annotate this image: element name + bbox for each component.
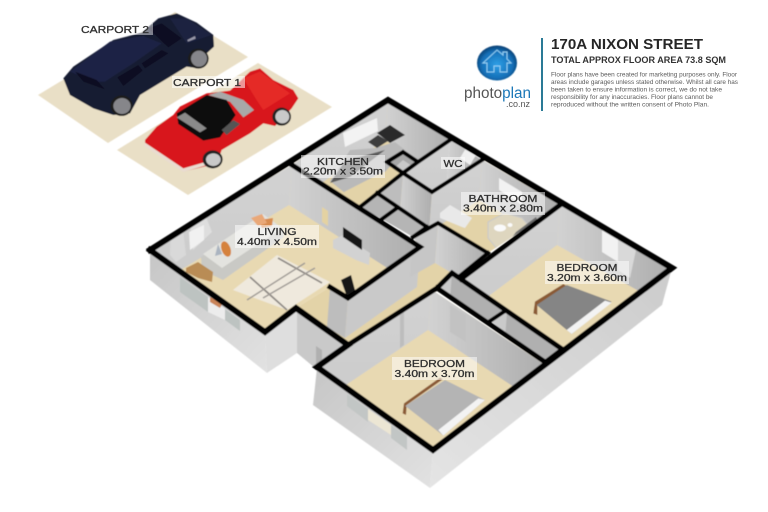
room: closet A — [440, 276, 503, 321]
sofa — [201, 214, 284, 280]
address title: 170A NIXON STREET — [551, 37, 703, 53]
label: bedroom 1 — [392, 357, 477, 380]
room: closet 2 — [383, 209, 424, 237]
door opening — [322, 207, 328, 226]
label: bathroom: 3.40m x 2.80m — [463, 202, 543, 214]
icon: blue house badge — [477, 46, 517, 80]
disclaimer text: reproduced without the written consent of Photo Plan. — [551, 102, 709, 108]
room: living — [154, 166, 416, 329]
label: bedroom 2 — [545, 261, 629, 284]
television — [343, 227, 362, 250]
TV unit — [333, 227, 370, 265]
label: living — [235, 225, 319, 248]
room: hall — [298, 224, 486, 342]
shower — [488, 213, 528, 250]
exterior windows — [180, 277, 407, 450]
navy car — [63, 13, 214, 116]
vanity — [440, 205, 472, 228]
red car — [144, 68, 298, 172]
exterior walls — [150, 250, 672, 488]
logo wordmark: photoplan — [464, 85, 531, 102]
door marks — [400, 312, 404, 348]
room: closet B — [491, 312, 559, 360]
floor plan — [145, 95, 675, 488]
label: carport 2: CARPORT 2 — [81, 24, 149, 36]
disclaimer text: Floor plans have been created for marketing purposes only. Floor — [551, 72, 737, 78]
disclaimer text — [551, 72, 738, 108]
label: kitchen: KITCHEN — [317, 156, 369, 168]
room: bedroom 2 — [464, 206, 668, 348]
walls — [150, 100, 672, 450]
room: WC — [406, 140, 481, 190]
label: bedroom 2: 3.20m x 3.60m — [547, 272, 627, 284]
chair — [341, 275, 355, 297]
kitchen bench — [330, 142, 405, 193]
logo: photoplan — [464, 46, 531, 109]
side table — [186, 262, 213, 282]
bathroom window — [499, 178, 522, 205]
bedroom 2 curtains and window — [602, 229, 618, 262]
room: bedroom 1 — [322, 291, 543, 447]
curtains — [170, 234, 186, 262]
label: living: 4.40m x 4.50m — [237, 236, 317, 248]
label: bedroom 1: 3.40m x 3.70m — [394, 368, 475, 380]
room: closet 1 — [362, 195, 396, 219]
disclaimer text: responsibility for any inaccuracies. Floor plans cannot be — [551, 95, 714, 101]
label: bathroom: BATHROOM — [468, 193, 538, 205]
logo domain: .co.nz — [506, 99, 530, 109]
label: kitchen — [301, 155, 385, 178]
room: kitchen — [294, 102, 449, 206]
carports and cars — [38, 12, 332, 195]
heading: address and disclaimer — [551, 37, 738, 108]
label: bathroom — [461, 192, 545, 215]
label: kitchen: 2.20m x 3.50m — [303, 166, 383, 178]
floor area: TOTAL APPROX FLOOR AREA 73.8 SQM — [551, 55, 726, 66]
bed — [533, 284, 612, 334]
disclaimer text: been taken to ensure information is correct, we do not take — [551, 88, 723, 94]
label: carport 1: CARPORT 1 — [173, 77, 241, 89]
label: bedroom 1: BEDROOM — [404, 358, 465, 370]
label: WC: WC — [444, 158, 463, 170]
label: living: LIVING — [258, 226, 296, 238]
disclaimer text: areas include garages unless stated otherwise. Whilst all care has — [551, 80, 738, 86]
room: bathroom and linen — [380, 160, 558, 253]
divider bar — [541, 38, 543, 111]
carport 1 floor — [117, 63, 332, 195]
carport 2 floor — [38, 12, 248, 143]
label: WC — [441, 157, 465, 170]
room: small cupboard — [390, 154, 416, 172]
label: bedroom 2: BEDROOM — [556, 262, 618, 274]
rug — [233, 255, 330, 310]
bed — [403, 378, 485, 436]
kitchen window — [343, 118, 378, 147]
